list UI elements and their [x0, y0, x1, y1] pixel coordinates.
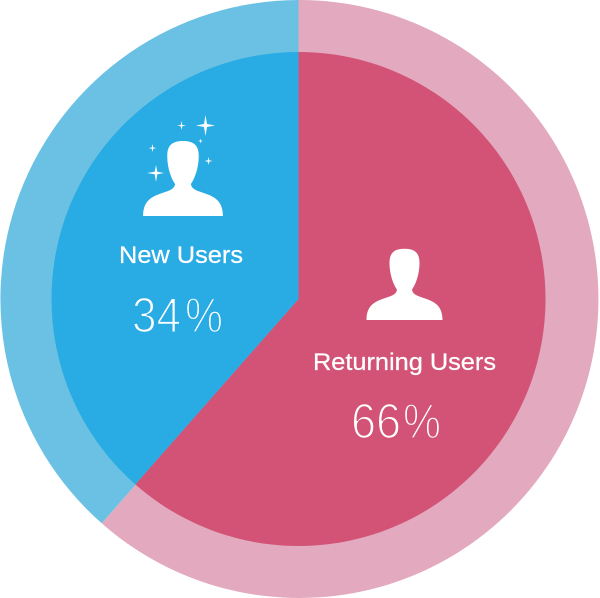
- inner pie slice: returning users: [135, 52, 546, 546]
- value: 66%: %: [403, 395, 441, 449]
- value: 34%: %: [185, 289, 223, 343]
- label: returning users: Returning Users: [313, 349, 496, 376]
- icon: returning user: [366, 249, 442, 320]
- value: 66%: [351, 395, 441, 449]
- value: 34%: 34: [132, 289, 181, 343]
- icon: new user with sparkles: [143, 115, 223, 216]
- value: 34%: [132, 289, 223, 343]
- inner pie slice: new users: [52, 52, 299, 484]
- value: 66%: 66: [351, 395, 401, 449]
- outer ring: new users: [0, 0, 298, 523]
- label: new users: New Users: [119, 242, 243, 269]
